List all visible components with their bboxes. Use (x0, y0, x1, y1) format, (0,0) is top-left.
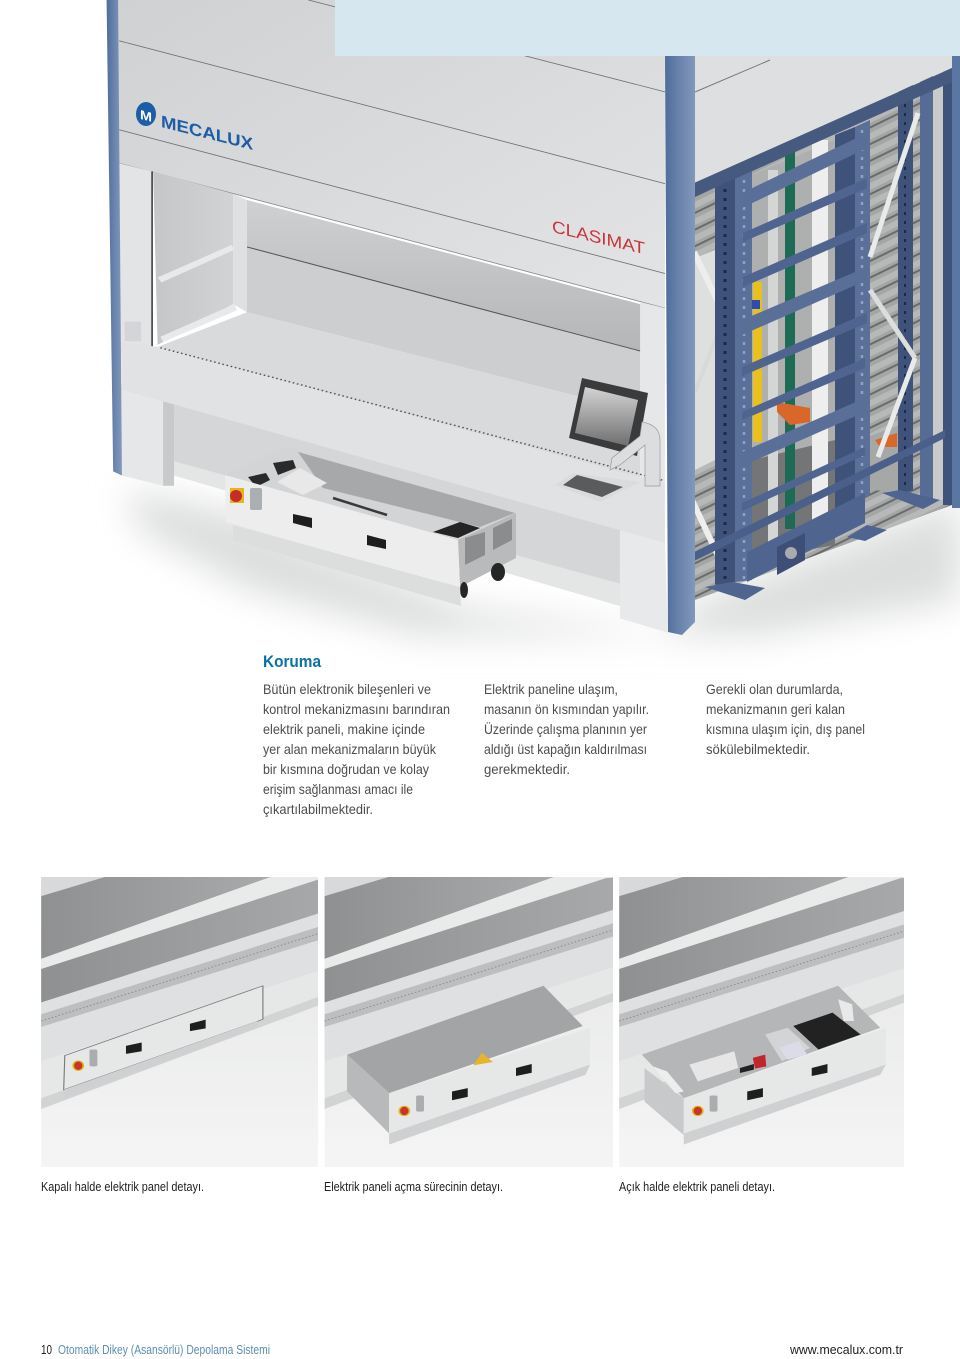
blue knob (748, 300, 760, 309)
vertical strips (768, 170, 778, 550)
text column 3: sökülebilmektedir. (706, 741, 810, 757)
floor shadow around machine (125, 490, 960, 635)
text column 3: Gerekli olan durumlarda, (706, 681, 843, 697)
drawer side with vents (458, 513, 516, 587)
caption: opening panel: Elektrik paneli açma sürecinin detayı. (324, 1180, 503, 1194)
storage rack frame (692, 68, 952, 600)
top beam (694, 68, 952, 197)
keyboard (555, 473, 640, 502)
open electrical drawer (225, 447, 516, 606)
text column 1: çıkartılabilmektedir. (263, 801, 373, 817)
slots (293, 514, 312, 528)
right white braces (870, 113, 918, 457)
text column 3: mekanizmanın geri kalan (706, 701, 845, 717)
base plate with motor (747, 493, 865, 582)
photo: panel opening (325, 870, 628, 1172)
monitor (569, 378, 648, 456)
text column 3: kısmına ulaşım için, dış panel (706, 721, 865, 737)
text column 2: aldığı üst kapağın kaldırılması (484, 741, 647, 757)
key switch (250, 488, 262, 510)
caption: open panel: Açık halde elektrik paneli detayı. (619, 1180, 775, 1194)
monitor arm (610, 422, 660, 486)
text column 2: masanın ön kısmından yapılır. (484, 701, 649, 717)
text column 2 (484, 681, 649, 777)
logo: Mecalux: MECALUX (161, 111, 254, 154)
yellow bar (753, 282, 762, 442)
left white braces (692, 252, 730, 577)
footer: document title: Otomatik Dikey (Asansörlü) Depolama Sistemi (58, 1342, 270, 1357)
text column 1: kontrol mekanizmasını barındıran (263, 701, 450, 717)
logo: Mecalux: M (140, 107, 152, 125)
drawer interior (225, 447, 515, 540)
light wall patches (695, 80, 945, 560)
feet (705, 490, 940, 600)
text column 1: bir kısmına doğrudan ve kolay (263, 761, 429, 777)
photo: open electrical panel (619, 870, 922, 1172)
text column 2: Elektrik paneline ulaşım, (484, 681, 618, 697)
front upper panels (118, 0, 665, 308)
drawer front (225, 475, 460, 587)
rungs (692, 133, 945, 562)
right side top panel (695, 56, 952, 183)
orange parts (777, 402, 897, 447)
logo: Mecalux (136, 102, 254, 154)
light blue header block (335, 0, 960, 56)
footer: page number: 10 (41, 1342, 52, 1357)
heading: Koruma: Koruma (263, 652, 321, 671)
slatted back wall (695, 75, 952, 600)
green rack (785, 152, 795, 529)
right blue post (952, 56, 960, 508)
text column 1: Bütün elektronik bileşenleri ve (263, 681, 431, 697)
illustration: Clasimat vertical lift machine front (107, 0, 668, 633)
emergency stop (230, 488, 244, 503)
brand: Clasimat: CLASIMAT (552, 216, 646, 258)
text column 2: Üzerinde çalışma planının yer (484, 720, 647, 737)
footer: website: www.mecalux.com.tr (789, 1342, 904, 1357)
photo: closed electrical panel (41, 877, 318, 1167)
central blue post (665, 56, 695, 635)
left blue post (107, 0, 122, 476)
text column 1 (263, 681, 450, 817)
text column 2: gerekmektedir. (484, 761, 570, 777)
caption: closed panel: Kapalı halde elektrik panel detayı. (41, 1180, 204, 1194)
opening with pillars, walls and worktop (119, 163, 665, 543)
base legs and recess (121, 384, 668, 633)
text column 1: yer alan mekanizmaların büyük (263, 741, 437, 757)
columns (715, 68, 952, 585)
text column 1: erişim sağlanması amacı ile (263, 781, 413, 797)
wheels (491, 563, 505, 581)
text column 1: elektrik paneli, makine içinde (263, 721, 425, 737)
text column 3 (706, 681, 865, 757)
